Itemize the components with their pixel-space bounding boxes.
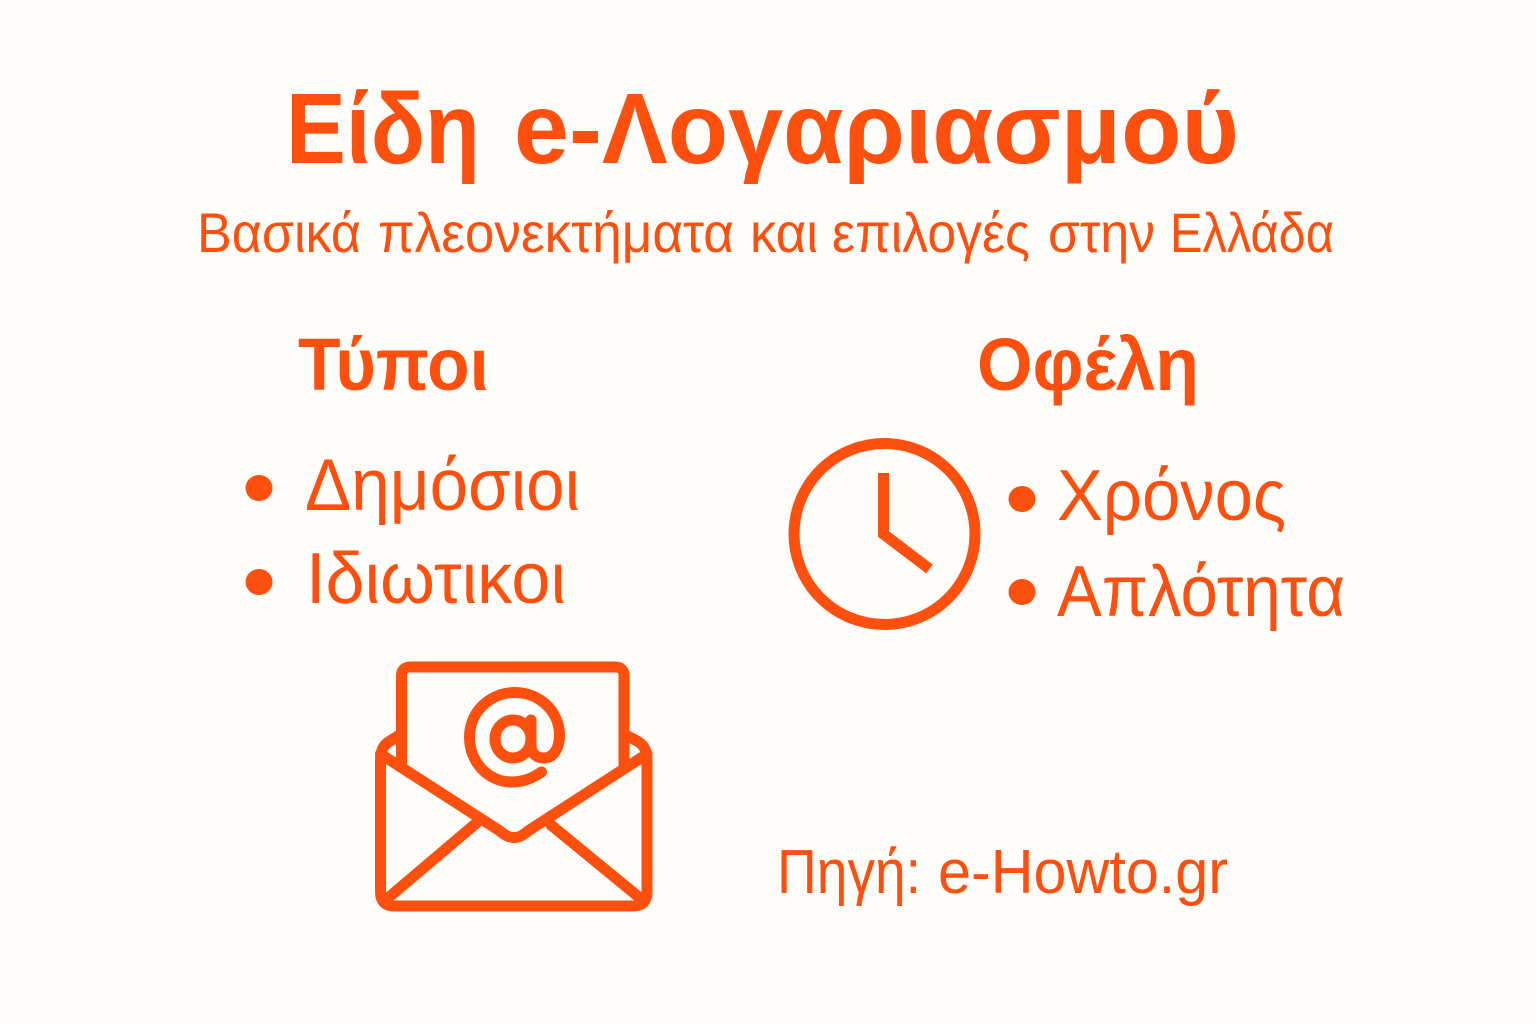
source text: Πηγή: bbox=[777, 838, 921, 907]
source text bbox=[777, 838, 1228, 907]
subtitle: Ελλάδα bbox=[1170, 201, 1334, 264]
heading: types: Τύποι bbox=[298, 323, 489, 406]
list item: public: Δημόσιοι bbox=[305, 445, 580, 526]
panel: benefits bbox=[794, 323, 1345, 632]
subtitle: επιλογές bbox=[832, 201, 1030, 264]
title: e-Λογαριασμού bbox=[514, 73, 1239, 185]
source text: e-Howto.gr bbox=[938, 838, 1228, 907]
subtitle: στην bbox=[1048, 201, 1155, 264]
list item: simplicity: Απλότητα bbox=[1057, 552, 1345, 632]
panel: types bbox=[246, 323, 580, 619]
list item: time: Χρόνος bbox=[1057, 456, 1286, 536]
icon: clock bbox=[794, 444, 975, 624]
subtitle bbox=[197, 201, 1334, 264]
title: Είδη bbox=[286, 73, 480, 185]
icon: envelope with at sign bbox=[380, 667, 647, 906]
subtitle: πλεονεκτήματα bbox=[378, 201, 734, 264]
subtitle: Βασικά bbox=[197, 201, 361, 264]
heading: benefits: Οφέλη bbox=[977, 323, 1199, 406]
list item: private: Ιδιωτικοι bbox=[306, 539, 566, 619]
subtitle: και bbox=[750, 201, 818, 264]
